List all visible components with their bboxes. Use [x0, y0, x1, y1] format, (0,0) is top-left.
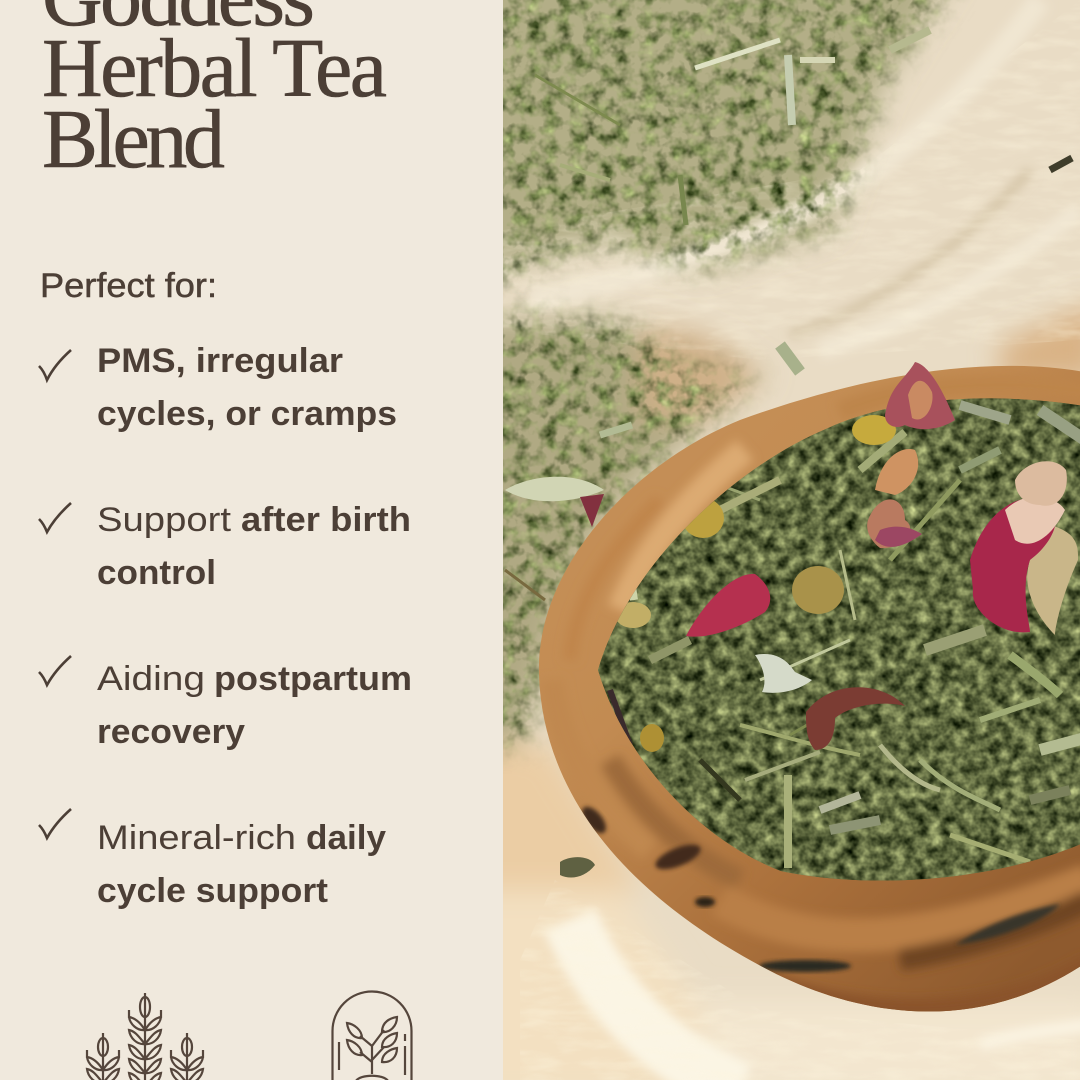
list item: postpartum recovery: postpartum	[214, 660, 412, 698]
pale grey leaf	[755, 654, 812, 693]
title: Blend	[42, 93, 225, 186]
list item: after birth control	[39, 501, 411, 592]
small stray leaf	[560, 857, 595, 878]
pink rose petal	[686, 574, 770, 637]
icon: plant in arch	[332, 992, 412, 1080]
dried rose petal, centre	[806, 687, 905, 750]
list item: daily cycle support: daily	[306, 819, 386, 857]
list item: postpartum recovery	[39, 656, 412, 751]
herb base	[590, 390, 1080, 890]
title: Herbal Tea	[42, 22, 387, 115]
list item: daily cycle support: Mineral-rich	[97, 819, 296, 857]
orange and purple petals	[867, 449, 922, 548]
top rose petals on rim	[885, 362, 955, 429]
list item: PMS	[39, 342, 397, 433]
icon: check mark	[39, 503, 71, 532]
warm wood-toned surface patches	[450, 0, 1080, 1080]
herbs in bowl	[590, 390, 1080, 890]
herb blades and leaves	[610, 405, 1080, 868]
list item: after birth control: control	[97, 554, 216, 592]
icon: wheat stalks	[87, 993, 203, 1080]
cheesecloth folds	[530, 0, 1080, 1080]
subheading: perfect for: Perfect for:	[40, 267, 217, 305]
left panel background	[0, 0, 503, 1080]
photo: wooden bowl of herbal tea on cloth	[450, 0, 1080, 1080]
scattered herbs, background	[480, 0, 955, 285]
rose bud	[970, 461, 1078, 635]
list item: postpartum recovery: Aiding	[97, 660, 205, 698]
pale leaf, background	[505, 477, 604, 501]
herb sprigs, background	[505, 30, 1072, 600]
list item: daily cycle support: cycle support	[97, 872, 328, 910]
photo background: cream cloth	[503, 0, 1080, 1080]
wooden bowl body	[539, 366, 1080, 1012]
title	[42, 0, 387, 186]
yellow chamomile flowers	[615, 415, 896, 752]
list item: after birth control: Support	[97, 501, 232, 539]
list item: PMS: PMS, irregular	[97, 342, 343, 380]
icon: check mark	[39, 809, 71, 838]
icon: check mark	[39, 656, 71, 685]
list item: postpartum recovery: recovery	[97, 713, 245, 751]
icon: check mark	[39, 350, 71, 380]
list item: after birth control: after birth	[241, 501, 411, 539]
list item: PMS: cycles, or cramps	[97, 395, 397, 433]
bowl shading and dark knots	[552, 385, 1080, 1010]
small dark purple petal, background	[580, 494, 604, 527]
cloth weave texture	[503, 44, 1080, 357]
list item: daily cycle support	[39, 809, 386, 910]
